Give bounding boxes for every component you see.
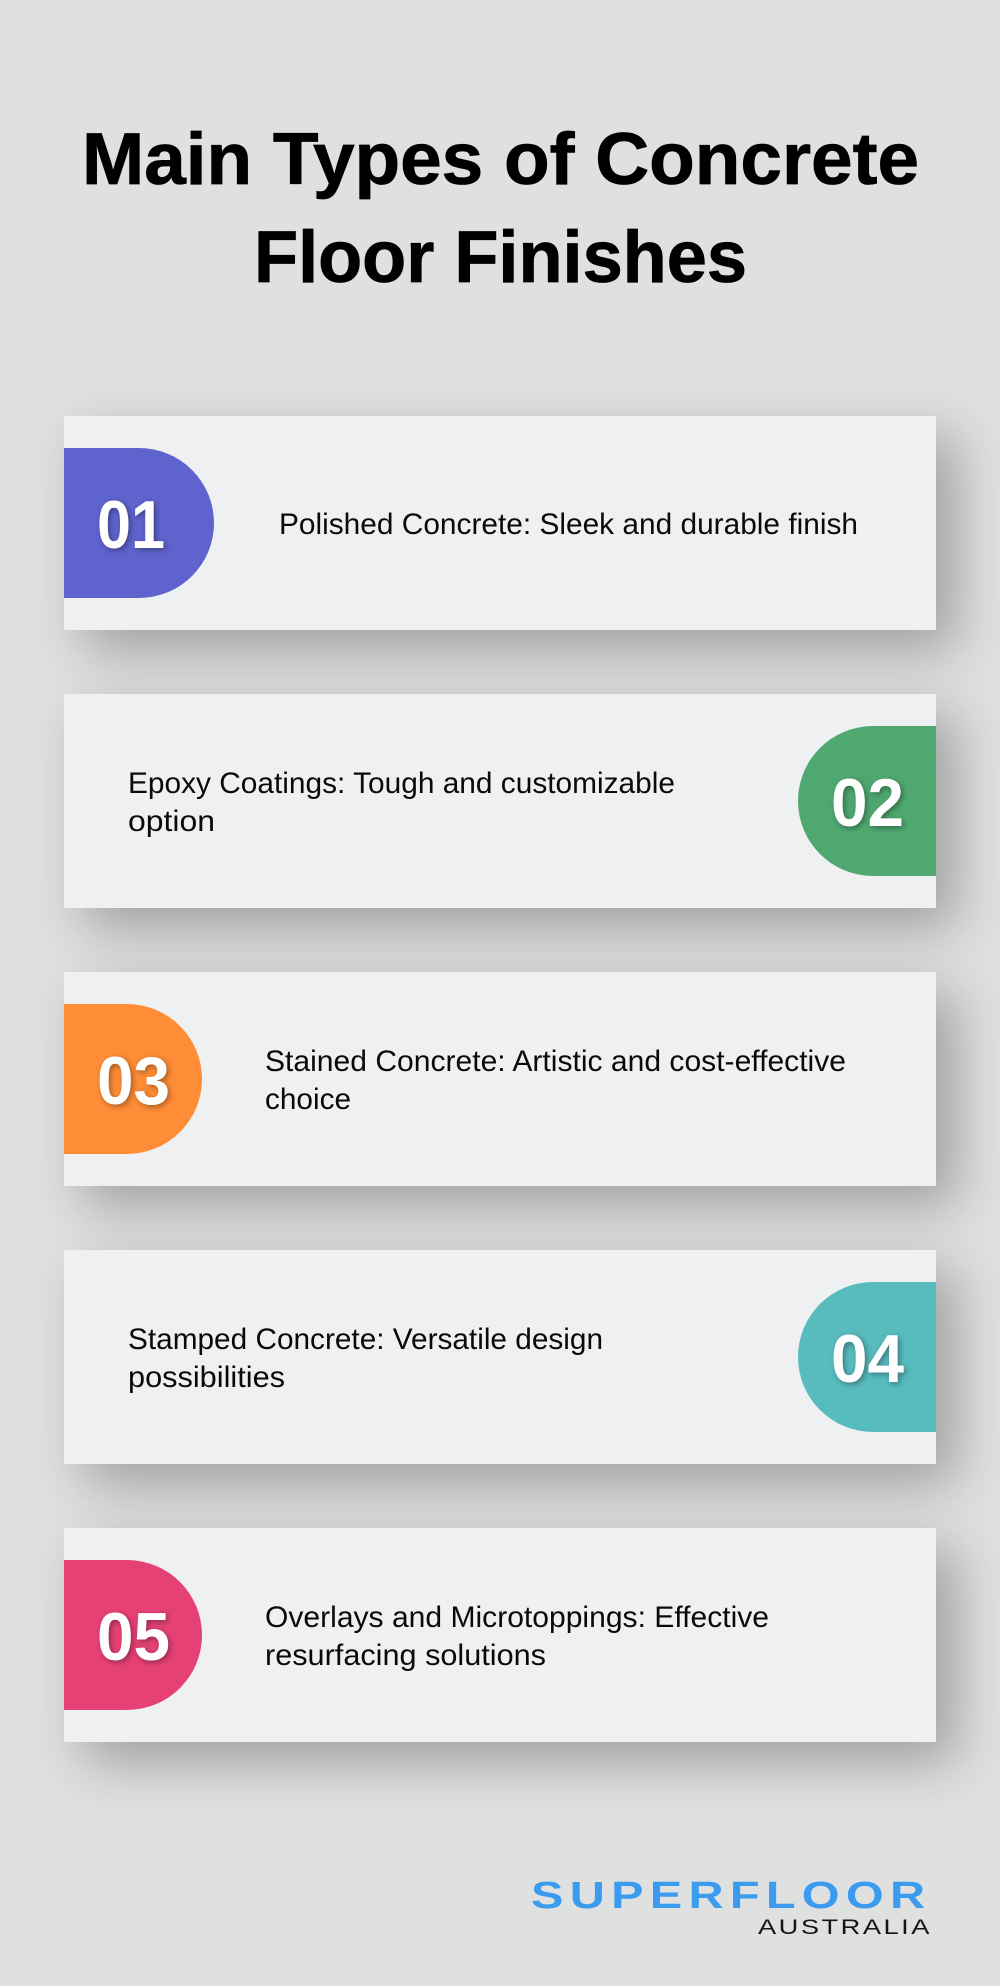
title: Floor Finishes <box>254 217 747 298</box>
text: epoxy coatings <box>128 767 675 838</box>
number badge 01: 01 <box>97 487 165 563</box>
text: stamped concrete <box>128 1323 603 1394</box>
panel: item 04 stamped concrete <box>64 1250 936 1464</box>
number badge 03 <box>64 1004 202 1154</box>
number badge 05: 05 <box>97 1599 170 1675</box>
logo: Superfloor Australia: SUPERFLOOR <box>531 1874 931 1917</box>
text: epoxy coatings: option <box>128 805 215 838</box>
text: stained concrete: choice <box>265 1083 351 1116</box>
text: overlays and microtoppings <box>265 1601 769 1672</box>
panel: item 05 overlays and microtoppings <box>64 1528 936 1742</box>
logo: Superfloor Australia <box>531 1874 932 1939</box>
text: stained concrete: Stained Concrete: Artistic and cost-effective <box>265 1045 846 1078</box>
number badge 01 <box>64 448 214 598</box>
title: Main Types of Concrete <box>82 119 919 200</box>
text: overlays and microtoppings: resurfacing solutions <box>265 1639 546 1672</box>
text: polished concrete: Polished Concrete: Sleek and durable finish <box>279 508 858 541</box>
panel: item 01 polished concrete <box>64 416 936 630</box>
number badge 04 <box>798 1282 936 1432</box>
number badge 05 <box>64 1560 202 1710</box>
text: stamped concrete: Stamped Concrete: Versatile design <box>128 1323 603 1356</box>
number badge 03: 03 <box>97 1043 170 1119</box>
text: stamped concrete: possibilities <box>128 1361 285 1394</box>
text: epoxy coatings: Epoxy Coatings: Tough and customizable <box>128 767 675 800</box>
text: stained concrete <box>265 1045 846 1116</box>
panel: item 02 epoxy coatings <box>64 694 936 908</box>
text: overlays and microtoppings: Overlays and Microtoppings: Effective <box>265 1601 769 1634</box>
title <box>82 119 919 298</box>
number badge 02 <box>798 726 936 876</box>
number badge 02: 02 <box>831 765 904 841</box>
number badge 04: 04 <box>831 1321 904 1397</box>
panel: item 03 stained concrete <box>64 972 936 1186</box>
logo: Superfloor Australia: AUSTRALIA <box>758 1916 932 1939</box>
